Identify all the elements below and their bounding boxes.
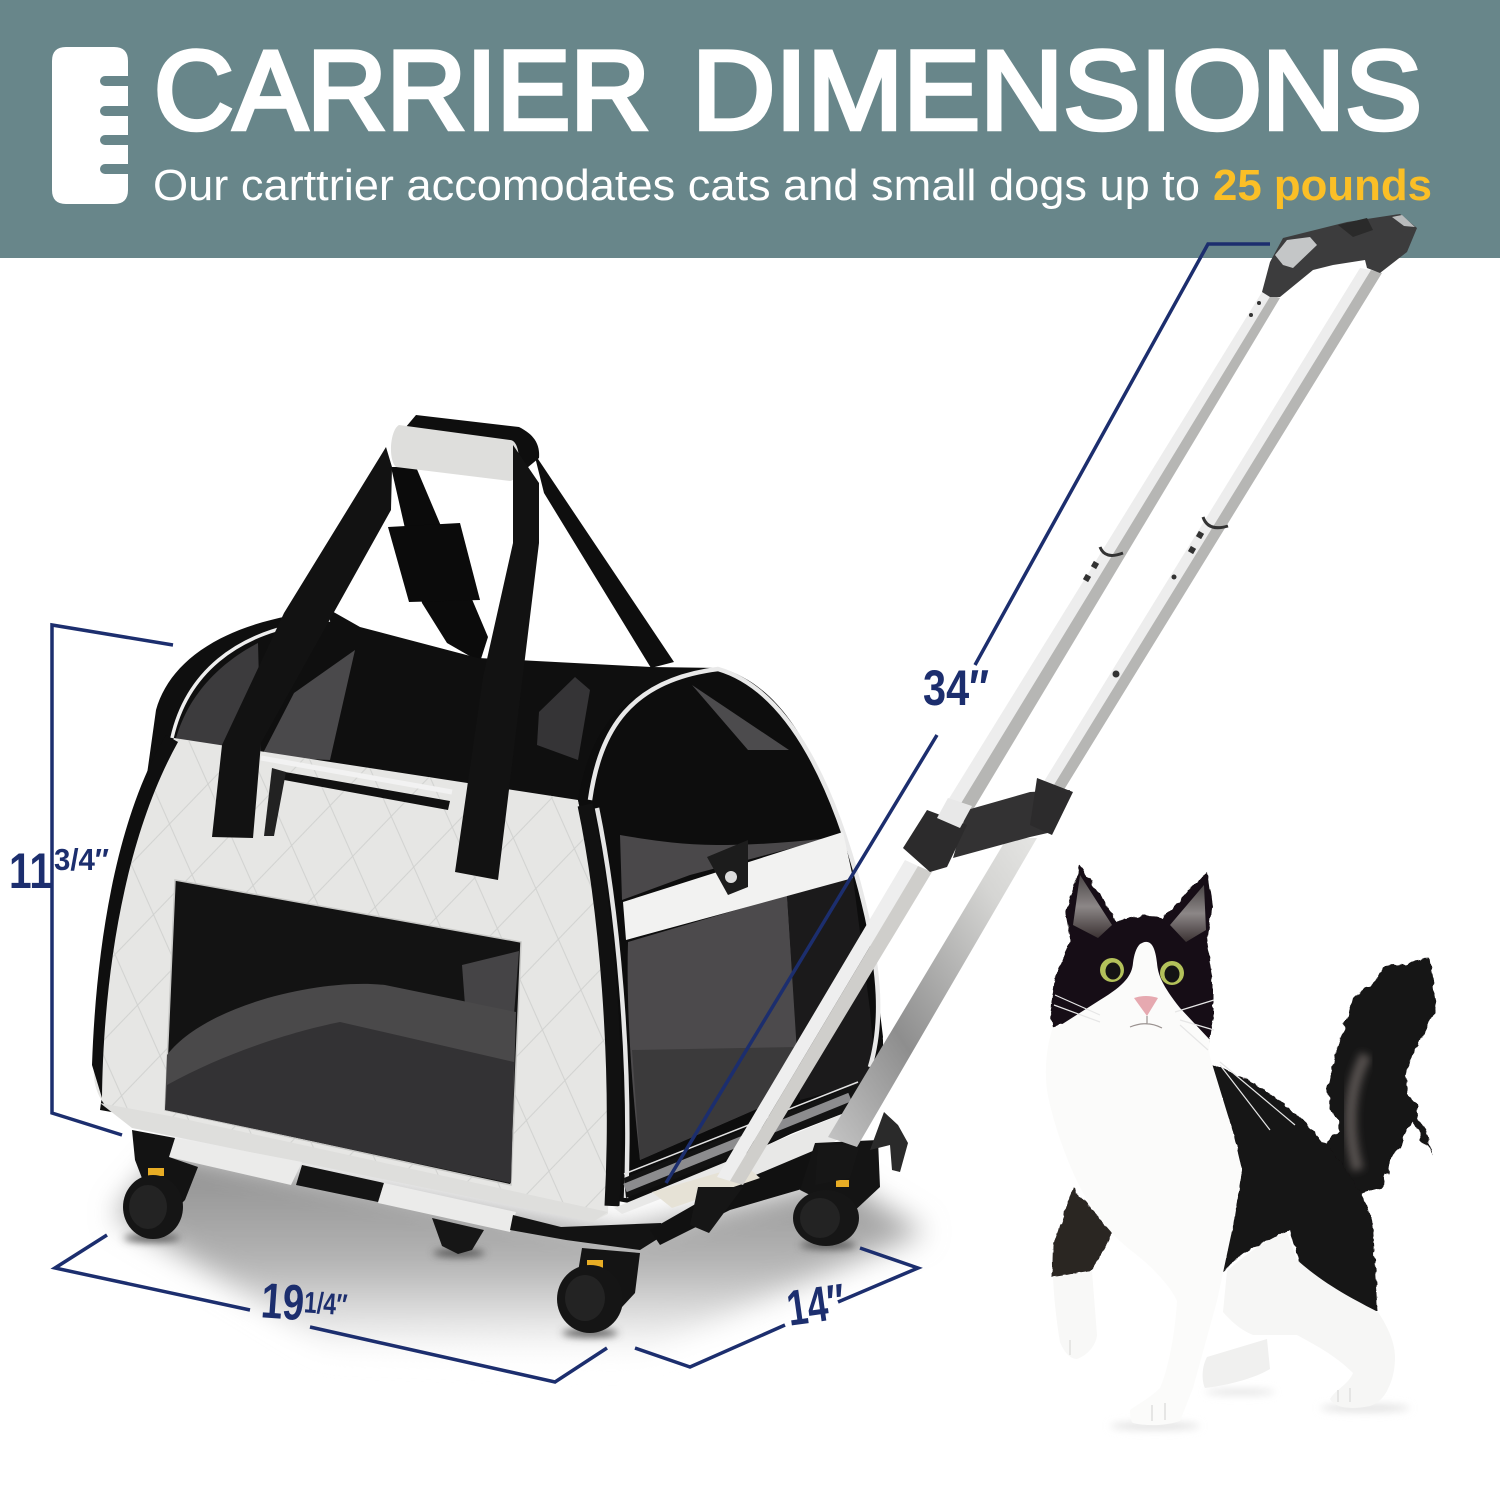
bag bottom lip <box>100 1103 608 1222</box>
title: CARRIER <box>154 28 650 153</box>
top grab handle <box>391 415 539 481</box>
cat black back and rear <box>1210 1064 1378 1312</box>
cat raised black forearm <box>1052 1188 1113 1277</box>
dimension label: height 11 3/4: 3/4″ <box>54 842 109 877</box>
back handle strap <box>534 453 674 668</box>
cat mouth <box>1130 1016 1162 1028</box>
header banner <box>0 0 1500 258</box>
dimension label: width 19 1/4: 19 <box>259 1272 306 1331</box>
side panel white edge piping <box>590 669 878 1067</box>
cat eyes <box>1100 958 1184 985</box>
cat paw toes <box>1070 1340 1350 1421</box>
caster: back left <box>432 1218 484 1254</box>
dimension label: height 11 3/4: 11 <box>9 843 52 899</box>
dimension line: width <box>55 1235 607 1382</box>
right lower rail <box>828 838 1037 1147</box>
title <box>154 28 1422 153</box>
inner cushion <box>165 984 516 1183</box>
dimension label: height 11 3/4 <box>9 842 109 899</box>
dimension line: handle length <box>666 244 1270 1183</box>
rail holes <box>1083 301 1261 678</box>
right upper rail <box>1043 268 1382 793</box>
icon: ruler <box>52 47 128 204</box>
cat tail <box>1327 959 1437 1196</box>
dimension line: depth <box>635 1248 918 1367</box>
cat back hidden leg <box>1203 1339 1270 1388</box>
left upper rail <box>937 292 1280 828</box>
cat nose <box>1134 996 1158 1016</box>
wheeled base <box>100 1103 908 1337</box>
dimension label: width 19 1/4: 1/4″ <box>303 1286 348 1322</box>
right front strap <box>455 445 539 880</box>
cat whiskers <box>1054 995 1295 1130</box>
reflective base band <box>614 1082 860 1214</box>
cat raised white paw <box>1053 1271 1097 1359</box>
strap buckle <box>870 1112 908 1172</box>
subtitle: 25 pounds <box>1213 161 1432 210</box>
window gray light patch <box>462 951 519 1015</box>
title: DIMENSIONS <box>692 28 1422 153</box>
middle grip <box>903 778 1073 872</box>
left lower rail <box>717 860 932 1185</box>
cat white belly and hind leg <box>1223 1232 1395 1408</box>
caster: front right <box>557 1248 640 1333</box>
dimension label: handle 34: 34″ <box>923 660 989 716</box>
caster: front left <box>123 1130 198 1239</box>
side white stripe with buckle <box>623 832 853 940</box>
base pivot joints <box>690 1145 860 1233</box>
dimension line: height <box>52 625 173 1135</box>
frame sleeves and bars <box>169 1138 850 1250</box>
dimension label: depth 14: 14″ <box>783 1273 849 1337</box>
top handle grip <box>1262 214 1417 297</box>
left front strap <box>212 447 392 838</box>
carrier back body <box>100 610 884 1205</box>
front pocket zip <box>261 758 452 836</box>
pet carrier bag <box>92 415 884 1220</box>
cat white muzzle blaze <box>1053 942 1210 1072</box>
subtitle: Our carttrier accomodates cats and small dogs up to <box>153 161 1200 210</box>
floor shadow <box>115 1150 925 1355</box>
rail clips and holes <box>1100 517 1228 555</box>
dimension label: width 19 1/4 <box>259 1272 349 1334</box>
telescoping trolley handle <box>717 214 1417 1185</box>
center zip band <box>585 805 614 1206</box>
cat inner ears <box>1073 875 1206 942</box>
cat <box>1046 865 1437 1430</box>
top arc piping <box>172 620 330 738</box>
cat white chest <box>1046 1020 1242 1425</box>
front mesh window <box>165 880 521 1185</box>
hanging shoulder strap with pad <box>388 467 488 662</box>
wheel contact shadows <box>124 1234 856 1337</box>
carrier front quilted panel <box>94 738 609 1220</box>
side panel <box>578 668 883 1200</box>
left black zip edge <box>92 735 178 1098</box>
cat ground shadows <box>1110 1389 1410 1430</box>
caster: back right <box>793 1140 880 1246</box>
top mesh gray patches <box>176 643 590 760</box>
cat head <box>1050 865 1213 1049</box>
